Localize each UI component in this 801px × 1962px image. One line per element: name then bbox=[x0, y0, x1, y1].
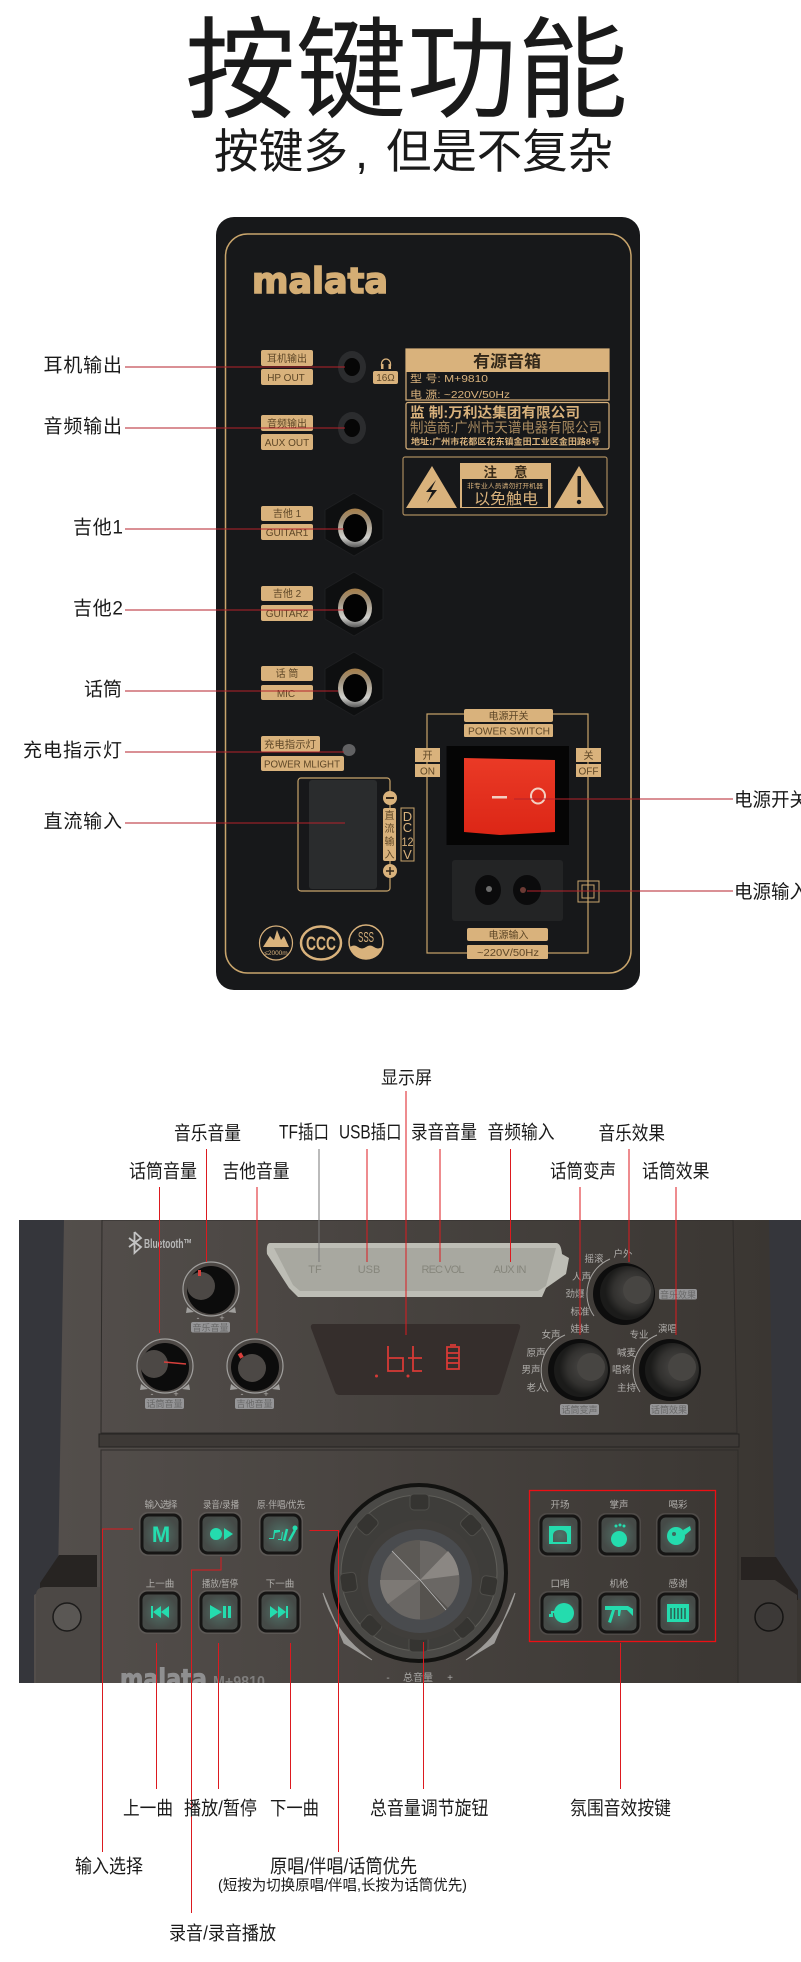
button labels: 录音/录播 bbox=[203, 1499, 239, 1511]
certification icons: CCC bbox=[306, 934, 336, 955]
callout: 话筒效果: 话筒效果 bbox=[642, 1160, 710, 1182]
callout: 氛围音效按键: 氛围音效按键 bbox=[570, 1798, 671, 1820]
button: input select: M bbox=[152, 1522, 170, 1547]
rating label: 有源音箱 bbox=[473, 351, 541, 371]
knob: 话筒效果: 唱将 bbox=[612, 1365, 631, 1376]
guitar 2 jack bbox=[261, 572, 383, 636]
callout: 播放/暂停: 播放/暂停 bbox=[184, 1798, 257, 1820]
callout: 音乐效果 bbox=[598, 1122, 665, 1262]
button labels: 口哨 bbox=[550, 1578, 570, 1590]
button labels: 开场 bbox=[550, 1500, 570, 1511]
guitar 2 jack: 吉他 2 bbox=[273, 587, 302, 600]
wing: right bbox=[741, 1557, 798, 1600]
DC input: 直 bbox=[384, 809, 394, 822]
port cover bbox=[267, 1243, 569, 1297]
button: cheer bbox=[656, 1513, 700, 1557]
callout: 话筒: 话筒 bbox=[84, 678, 122, 700]
DC input: C bbox=[403, 820, 412, 835]
knob: 音乐音量 bbox=[183, 1262, 239, 1333]
callout: 显示屏: 显示屏 bbox=[381, 1068, 432, 1088]
guitar 1 jack: 吉他 1 bbox=[273, 507, 302, 520]
button: next bbox=[257, 1590, 301, 1634]
panel: upper section bbox=[101, 1220, 737, 1433]
mic jack: MIC bbox=[277, 689, 295, 700]
callout: 充电指示灯: 充电指示灯 bbox=[23, 740, 122, 762]
subtitle: 但是不复杂 bbox=[386, 125, 613, 178]
port cover: TF bbox=[308, 1264, 322, 1276]
button: vocal/accompaniment bbox=[259, 1512, 303, 1556]
knob: 音乐效果: 摇滚 bbox=[584, 1253, 604, 1265]
DC input: 输 bbox=[384, 835, 394, 848]
charge indicator bbox=[261, 736, 356, 771]
power switch bbox=[415, 709, 601, 953]
AC power inlet bbox=[452, 860, 599, 959]
rating label: 电 源: ~220V/50Hz bbox=[410, 388, 510, 401]
main volume knob bbox=[323, 1485, 515, 1684]
callout: 吉他1: 吉他1 bbox=[73, 516, 123, 538]
callout: 录音音量: 录音音量 bbox=[411, 1122, 477, 1144]
button labels bbox=[144, 1499, 688, 1590]
rating label: 地址:广州市花都区花东镇金田工业区金田路8号 bbox=[411, 436, 600, 446]
headphone output port bbox=[261, 350, 398, 385]
knob: 话筒变声: 原声 bbox=[526, 1347, 546, 1359]
button: thanks bbox=[656, 1591, 700, 1635]
button labels: 掌声 bbox=[609, 1499, 629, 1511]
knob: 音乐音量: + bbox=[219, 1313, 225, 1323]
callout: 耳机输出: 耳机输出 bbox=[44, 354, 122, 376]
panel: lower section bbox=[101, 1450, 738, 1690]
knob: 吉他音量: 吉他音量 bbox=[236, 1398, 273, 1409]
knob: 吉他音量 bbox=[227, 1339, 283, 1409]
power switch: OFF bbox=[578, 766, 598, 778]
guitar 1 jack: GUITAR1 bbox=[266, 528, 309, 539]
aux output port: AUX OUT bbox=[265, 438, 309, 449]
power switch: 电源开关 bbox=[488, 710, 528, 722]
knob: 话筒变声: 老人 bbox=[526, 1382, 546, 1394]
knob: 音乐音量: 音乐音量 bbox=[192, 1322, 229, 1333]
knob: 音乐效果: 音乐效果 bbox=[660, 1289, 696, 1300]
main volume knob: 总音量 bbox=[403, 1671, 433, 1684]
callout: 音乐效果: 音乐效果 bbox=[598, 1122, 665, 1144]
callout: 输入选择: 输入选择 bbox=[75, 1856, 143, 1878]
aux output port bbox=[261, 412, 366, 450]
knob: 话筒音量: + bbox=[173, 1389, 179, 1399]
power switch: POWER SWITCH bbox=[468, 726, 550, 738]
DC input bbox=[298, 778, 414, 891]
warning label bbox=[403, 457, 607, 515]
callout: 直流输入: 直流输入 bbox=[44, 810, 122, 832]
charge indicator: POWER MLIGHT bbox=[264, 760, 340, 770]
guitar 1 jack bbox=[261, 493, 383, 556]
warning label: 非专业人员请勿打开机器 bbox=[467, 481, 544, 490]
warning label: 注 意 bbox=[484, 464, 528, 480]
callout: 音乐音量: 音乐音量 bbox=[174, 1122, 241, 1144]
button: whistle bbox=[539, 1591, 583, 1635]
subtitle: 按键多 bbox=[214, 125, 348, 178]
bluetooth logo: Bluetooth™ bbox=[144, 1236, 192, 1251]
callout: 话筒音量: 话筒音量 bbox=[129, 1160, 197, 1182]
callout: 原唱/伴唱/话筒优先: (短按为切换原唱/伴唱,长按为话筒优先) bbox=[218, 1877, 467, 1894]
callout: 原唱/伴唱/话筒优先: 原唱/伴唱/话筒优先 bbox=[270, 1856, 417, 1878]
screw left bbox=[53, 1603, 81, 1631]
knob: 话筒音量: - bbox=[150, 1389, 154, 1399]
button labels: 机枪 bbox=[609, 1578, 629, 1590]
guitar 2 jack: GUITAR2 bbox=[266, 609, 309, 620]
callout: 输入选择 bbox=[75, 1529, 143, 1878]
subtitle: , bbox=[355, 125, 368, 178]
knob: 话筒效果: 主持 bbox=[617, 1382, 636, 1394]
main volume knob: + bbox=[447, 1673, 453, 1684]
knob: 音乐效果: 标准 bbox=[570, 1306, 590, 1318]
knob: 话筒效果: 专业 bbox=[629, 1329, 649, 1341]
knob: 话筒变声 bbox=[521, 1323, 610, 1415]
power switch: 开 bbox=[422, 751, 432, 762]
charge indicator: 充电指示灯 bbox=[264, 738, 316, 751]
panel: speaker rear panel bbox=[216, 217, 640, 990]
knob: 音乐效果 bbox=[565, 1248, 697, 1325]
button labels: 原·伴唱/优先 bbox=[257, 1499, 305, 1511]
mic jack: 话 筒 bbox=[276, 667, 298, 680]
callout: USB插口: USB插口 bbox=[339, 1122, 402, 1144]
power switch: ON bbox=[420, 766, 435, 778]
button labels: 播放/暂停 bbox=[202, 1578, 238, 1590]
button labels: 下一曲 bbox=[266, 1579, 294, 1590]
knob: 话筒效果: 演唱 bbox=[658, 1323, 677, 1335]
wing: left bbox=[40, 1555, 97, 1590]
malata logo: malata bbox=[252, 261, 388, 302]
title: 按键功能 bbox=[185, 10, 628, 133]
callout: 录音/录音播放 bbox=[169, 1557, 276, 1944]
rating label: 监 制:万利达集团有限公司 bbox=[410, 404, 580, 420]
headphone output port: 耳机输出 bbox=[267, 352, 307, 365]
button: play pause bbox=[198, 1590, 242, 1634]
knob: 音乐效果: 户外 bbox=[613, 1248, 633, 1260]
knob: 话筒音量: 话筒音量 bbox=[146, 1398, 183, 1409]
effect buttons frame bbox=[530, 1490, 716, 1642]
rating label: 型 号: M+9810 bbox=[410, 372, 488, 385]
port cover: USB bbox=[358, 1264, 380, 1276]
knob: 吉他音量: + bbox=[263, 1389, 269, 1399]
knob: 音乐音量: - bbox=[196, 1313, 200, 1323]
knob: 话筒变声: 女声 bbox=[541, 1329, 561, 1341]
knob: 音乐效果: 人声 bbox=[572, 1271, 591, 1283]
certification icons: ≤2000m bbox=[264, 950, 288, 957]
main volume knob: - bbox=[386, 1673, 390, 1684]
knob: 音乐效果: 劲爆 bbox=[565, 1288, 585, 1300]
bluetooth logo bbox=[129, 1232, 192, 1253]
rating label bbox=[406, 349, 610, 449]
screw right bbox=[755, 1603, 783, 1631]
bottom logo bbox=[121, 1667, 264, 1683]
callout: TF插口: TF插口 bbox=[279, 1122, 329, 1144]
knob: 话筒变声: 话筒变声 bbox=[561, 1404, 598, 1415]
callout: 音频输入: 音频输入 bbox=[488, 1122, 554, 1144]
certification icons bbox=[260, 925, 383, 960]
subtitle bbox=[214, 125, 613, 178]
knob: 话筒效果: 话筒效果 bbox=[651, 1404, 687, 1415]
button: input select bbox=[139, 1512, 183, 1556]
DC input: 12 bbox=[402, 835, 414, 849]
warning label: 以免触电 bbox=[474, 490, 538, 508]
button: previous bbox=[138, 1590, 182, 1634]
bottom logo: malata bbox=[120, 1664, 207, 1695]
callout: 吉他音量: 吉他音量 bbox=[222, 1160, 290, 1182]
callout: 录音/录音播放: 录音/录音播放 bbox=[169, 1922, 276, 1944]
knob: 话筒变声: 男声 bbox=[521, 1364, 541, 1376]
DC input: 流 bbox=[384, 822, 394, 835]
callout: 下一曲: 下一曲 bbox=[270, 1798, 319, 1820]
button labels: 输入选择 bbox=[144, 1499, 178, 1511]
bottom logo: M+9810 bbox=[213, 1674, 265, 1691]
callout: 上一曲: 上一曲 bbox=[123, 1798, 173, 1820]
DC input: V bbox=[403, 847, 412, 862]
port cover: AUX IN bbox=[494, 1264, 527, 1276]
button labels: 感谢 bbox=[668, 1578, 688, 1590]
knob: 话筒变声: 娃娃 bbox=[570, 1323, 590, 1335]
power switch: 关 bbox=[584, 749, 594, 762]
rating label: 制造商:广州市天谱电器有限公司 bbox=[410, 420, 602, 436]
AC power inlet: ~220V/50Hz bbox=[477, 948, 539, 959]
callout: 总音量调节旋钮: 总音量调节旋钮 bbox=[370, 1798, 488, 1820]
knob: 话筒效果 bbox=[612, 1323, 701, 1415]
photo: control panel bbox=[19, 1220, 801, 1695]
port cover: REC VOL bbox=[422, 1264, 464, 1276]
callout: 音乐音量 bbox=[174, 1122, 241, 1262]
knob: 吉他音量: - bbox=[240, 1389, 244, 1399]
button: machine gun bbox=[597, 1591, 641, 1635]
button labels: 喝彩 bbox=[668, 1500, 688, 1511]
DC input: D bbox=[403, 809, 412, 824]
display screen bbox=[311, 1324, 520, 1395]
callout: 原唱/伴唱/话筒优先 bbox=[218, 1530, 467, 1894]
knob: 话筒效果: 喊麦 bbox=[617, 1347, 636, 1359]
button: record bbox=[198, 1512, 242, 1556]
button labels: 上一曲 bbox=[146, 1579, 174, 1590]
headphone output port: HP OUT bbox=[267, 373, 305, 384]
button: opening bbox=[538, 1513, 582, 1557]
aux output port: 音频输出 bbox=[267, 417, 307, 430]
button: applause bbox=[597, 1513, 641, 1557]
certification icons: SSS bbox=[358, 929, 374, 946]
mic jack bbox=[261, 652, 383, 716]
headphone output port: 16Ω bbox=[376, 373, 395, 384]
callout: 音频输出: 音频输出 bbox=[44, 416, 122, 438]
callout: 吉他2: 吉他2 bbox=[73, 598, 123, 620]
knob: 话筒音量 bbox=[137, 1339, 193, 1409]
AC power inlet: 电源输入 bbox=[488, 928, 528, 942]
DC input: 入 bbox=[384, 850, 394, 861]
callout: 话筒变声: 话筒变声 bbox=[550, 1160, 616, 1182]
